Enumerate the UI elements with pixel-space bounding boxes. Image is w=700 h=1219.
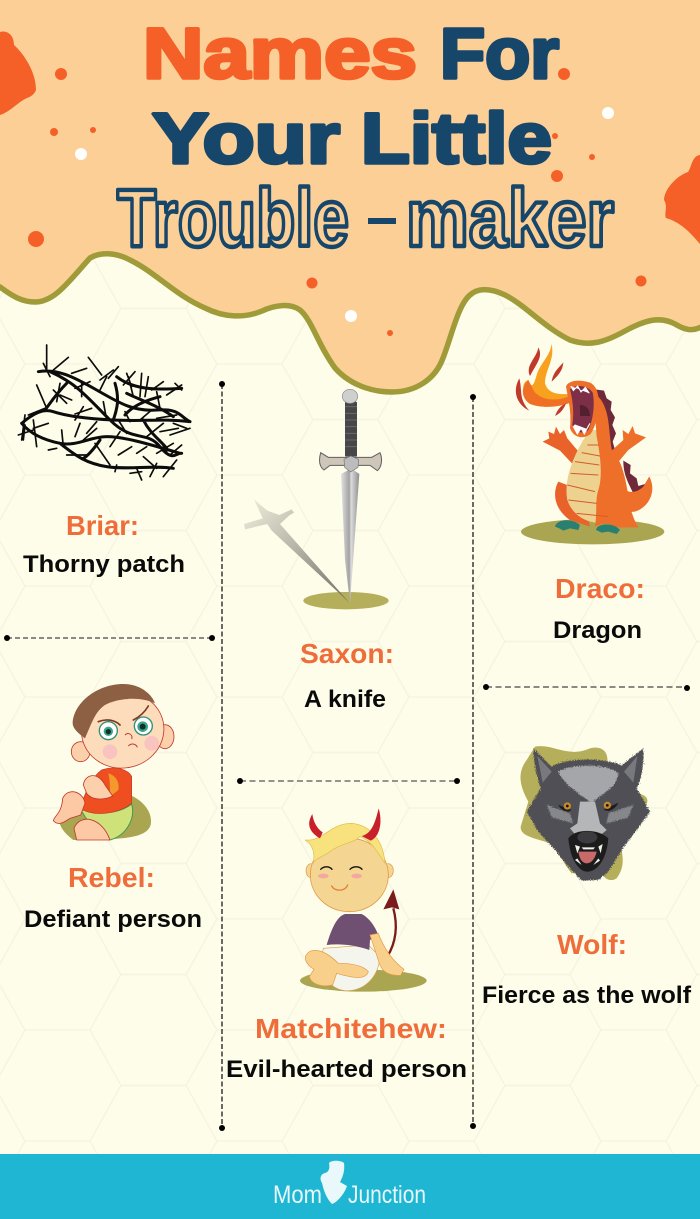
logo: MomJunction: Junction — [348, 1181, 426, 1209]
label: Matchitehew — [226, 1013, 467, 1083]
footer band — [0, 1154, 700, 1219]
label: Matchitehew: Evil-hearted person — [226, 1056, 467, 1083]
label: Briar: Thorny patch — [23, 551, 185, 578]
label: Wolf — [482, 929, 692, 1009]
title — [117, 15, 614, 264]
title: Your — [152, 100, 340, 179]
title: Little — [361, 100, 552, 179]
icon: snarling wolf — [520, 746, 650, 881]
label: Saxon: Saxon: — [300, 638, 394, 669]
icon: fire-breathing dragon — [516, 344, 664, 544]
label: Wolf: Fierce as the wolf — [482, 982, 692, 1009]
logo: MomJunction — [273, 1161, 426, 1209]
label: Briar — [23, 510, 185, 578]
label: Draco — [553, 573, 645, 644]
label: Draco: Draco: — [555, 573, 645, 604]
title: Names — [143, 15, 417, 94]
decorative blobs and dots — [0, 32, 700, 336]
icon: dagger — [244, 389, 389, 609]
label: Rebel: Defiant person — [24, 906, 202, 933]
label: Rebel: Rebel: — [68, 862, 155, 893]
label: Saxon: A knife — [304, 686, 386, 713]
logo: MomJunction: Mom — [273, 1181, 322, 1209]
label: Briar: Briar: — [66, 510, 139, 541]
title: For — [440, 15, 559, 94]
label: Wolf: Wolf: — [557, 929, 627, 960]
title: Trouble — [117, 173, 349, 264]
title: maker — [406, 173, 614, 264]
header: peach dripping wave — [0, 0, 700, 392]
label: Draco: Dragon — [553, 617, 642, 644]
icon: little devil child — [300, 808, 427, 992]
icon: angry baby — [53, 684, 174, 840]
dashed dividers — [4, 381, 690, 1131]
icon: thorny briar — [18, 345, 190, 480]
label: Matchitehew: Matchitehew: — [255, 1013, 447, 1044]
label: Saxon — [300, 638, 394, 713]
label: Rebel — [24, 862, 202, 933]
